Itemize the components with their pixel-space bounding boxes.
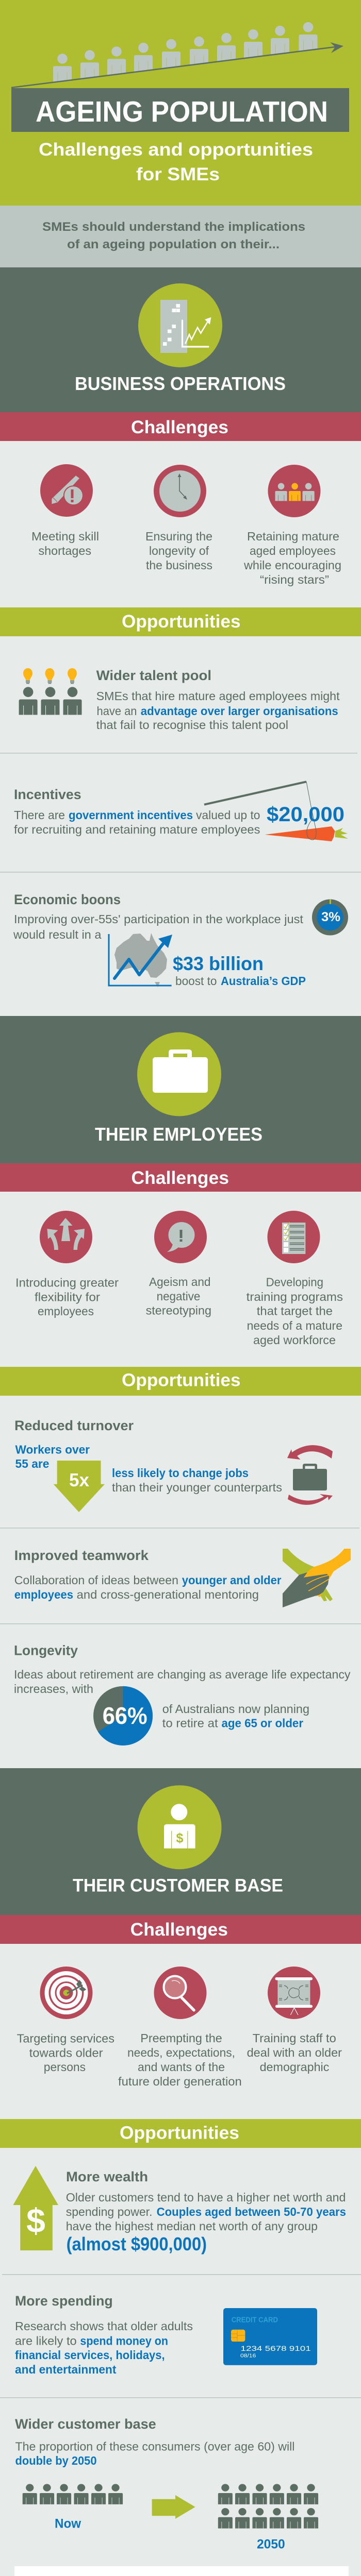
text: more spending — [15, 2293, 193, 2376]
icon: joined hands — [283, 1549, 351, 1607]
text: ensuring longevity: the business — [146, 558, 212, 572]
heading: opportunities — [0, 1367, 361, 1396]
text: reduced turnover heading: Workers over — [15, 1443, 90, 1456]
text: preempting needs: future older generation — [118, 2075, 242, 2088]
text: wider talent pool: have an — [97, 704, 137, 718]
icon: building and growth chart — [138, 283, 222, 367]
panel: logo — [14, 2566, 349, 2576]
text: wider talent pool: Wider talent pool — [96, 668, 211, 683]
chart: 3% ring — [312, 900, 348, 936]
icon: three direction arrows — [40, 1211, 92, 1263]
text: preempting needs: needs, expectations, — [127, 2046, 235, 2059]
panel: business challenges — [0, 441, 361, 607]
text: training staff — [247, 2031, 342, 2074]
icon: people with light bulbs — [19, 668, 81, 715]
text: training programs — [247, 1276, 343, 1347]
text: incentives: There are — [14, 808, 65, 822]
text: incentives: valued up to — [196, 808, 260, 822]
heading: challenges — [0, 1163, 361, 1192]
text: reduced turnover heading: 55 are — [15, 1457, 50, 1470]
icon: people in 2050 — [218, 2484, 318, 2529]
text: retirement stat: age 65 or older — [222, 1717, 303, 1730]
icon: checklist — [267, 1211, 320, 1263]
text: greater flexibility — [15, 1276, 119, 1318]
subtitle — [39, 140, 313, 184]
text: longevity — [14, 1643, 351, 1696]
stat: $33 billion GDP boost — [173, 953, 306, 988]
text: retaining mature employees: aged employees — [250, 544, 336, 557]
text: meeting skill shortages — [31, 530, 99, 557]
text: training programs: needs of a mature — [247, 1319, 342, 1332]
text: more wealth: have the highest median net worth of any group — [66, 2219, 318, 2233]
icon: up arrow with dollar: $ — [26, 2201, 45, 2240]
text: retaining mature employees: while encouraging — [243, 558, 341, 572]
text: more spending: financial services, holidays, — [15, 2348, 165, 2362]
text: training programs: aged workforce — [253, 1333, 336, 1347]
text: ageism: Ageism and — [149, 1275, 210, 1289]
heading: challenges — [0, 1915, 361, 1944]
panel: introduction: of an ageing population on their... — [67, 238, 280, 251]
text: economic boons: Improving over-55s' participation in the workplace just — [14, 912, 303, 926]
text: reduced turnover heading: Reduced turnover — [14, 1418, 134, 1433]
label: 2050: 2050 — [257, 2537, 285, 2552]
icon: presentation board — [268, 1967, 320, 2019]
text: economic boons: would result in a — [13, 928, 102, 941]
icon: target with arrow — [40, 1967, 93, 2019]
text: improved teamwork: Improved teamwork — [14, 1548, 149, 1563]
icon: customer with dollar — [137, 1785, 222, 1869]
title — [11, 88, 349, 132]
text: more wealth: (almost $900,000) — [67, 2233, 207, 2255]
text: less likely to change jobs — [112, 1466, 282, 1494]
panel: employee challenges — [0, 1192, 361, 1367]
text: longevity: Ideas about retirement are changing as average life expectancy — [14, 1668, 351, 1681]
text: improved teamwork — [14, 1548, 281, 1601]
text: less likely to change jobs: less likely to change jobs — [112, 1466, 249, 1480]
text: improved teamwork: and cross-generational mentoring — [77, 1588, 259, 1601]
text: ensuring longevity: longevity of — [149, 544, 209, 557]
panel: introduction: SMEs should understand the implications — [42, 220, 305, 234]
panel: introduction — [0, 206, 361, 267]
text: retirement stat: to retire at — [162, 1717, 218, 1730]
text: greater flexibility: employees — [38, 1304, 94, 1318]
text: greater flexibility: Introducing greater — [15, 1276, 119, 1290]
text: more spending: are likely to — [15, 2334, 77, 2348]
text: targeting services: towards older — [29, 2046, 103, 2059]
panel: business operations banner — [0, 267, 361, 412]
heading: their employees: THEIR EMPLOYEES — [95, 1124, 262, 1145]
stat: 5x down arrow: 5x — [69, 1469, 89, 1490]
text: longevity: Longevity — [14, 1643, 78, 1658]
text: ageism — [146, 1275, 211, 1317]
stat: $33 billion GDP boost: Australia’s GDP — [221, 974, 306, 988]
panel: employee opportunities — [0, 1396, 361, 1768]
icon: people now — [23, 2484, 123, 2504]
icon: clock — [154, 465, 206, 517]
text: incentives: government incentives — [69, 808, 193, 822]
text: wider customer base — [15, 2416, 294, 2467]
icon: pencil with warning — [40, 464, 93, 517]
stat: 5x down arrow — [54, 1461, 105, 1512]
icon: Australia map with rising GDP chart — [109, 933, 172, 987]
text: meeting skill shortages: Meeting skill — [31, 530, 99, 543]
panel: business opportunities — [0, 636, 361, 1016]
text: more wealth: More wealth — [66, 2169, 148, 2184]
text: more spending: More spending — [15, 2293, 113, 2309]
icon: briefcase — [137, 1032, 221, 1116]
text: more wealth: Couples aged between 50-70 years — [157, 2205, 346, 2218]
icon: speech bubble with exclamation — [154, 1211, 207, 1263]
text: training staff: demographic — [260, 2060, 330, 2074]
heading: opportunities: Opportunities — [122, 1370, 240, 1391]
text: more wealth: Older customers tend to have a higher net worth and — [66, 2191, 346, 2204]
text: economic boons: Economic boons — [14, 892, 121, 907]
icon: magnifying glass — [154, 1967, 206, 2019]
text: less likely to change jobs: than their younger counterparts — [112, 1481, 282, 1494]
text: economic boons — [13, 892, 303, 941]
text: training programs: that target the — [257, 1304, 333, 1318]
icon: carrot on a fishing rod — [204, 782, 348, 841]
chart: 3% ring: 3% — [321, 910, 340, 924]
heading: opportunities — [0, 607, 361, 636]
text: meeting skill shortages: shortages — [38, 544, 91, 557]
icon: up arrow with dollar — [13, 2166, 58, 2250]
icon: rising row of people — [53, 22, 318, 84]
text: incentives — [14, 787, 260, 836]
heading: challenges: Challenges — [130, 1920, 228, 1940]
subtitle: Challenges and opportunities — [39, 140, 313, 160]
text: ageism: stereotyping — [146, 1304, 211, 1317]
text: longevity: increases, with — [14, 1682, 93, 1696]
title: AGEING POPULATION — [36, 95, 328, 128]
text: ageism: negative — [157, 1290, 200, 1303]
text: incentives: for recruiting and retaining mature employees — [14, 823, 260, 836]
text: preempting needs: Preempting the — [140, 2031, 222, 2045]
stat: $33 billion GDP boost: $33 billion — [173, 953, 264, 974]
text: more wealth — [66, 2169, 346, 2255]
text: retirement stat — [162, 1702, 309, 1730]
text: more spending: spend money on — [80, 2334, 168, 2348]
subtitle: for SMEs — [136, 164, 220, 184]
text: retirement stat: of Australians now planning — [162, 1702, 309, 1716]
heading: their customer base: THEIR CUSTOMER BASE — [73, 1876, 283, 1896]
text: more spending: and entertainment — [15, 2363, 117, 2376]
text: wider customer base: The proportion of these consumers (over age 60) will — [15, 2440, 294, 2453]
text: ensuring longevity — [145, 530, 212, 572]
arrow: rising — [11, 42, 343, 88]
icon: credit card: 08/16 — [240, 2353, 256, 2359]
text: wider customer base: double by 2050 — [15, 2454, 97, 2467]
icon: briefcase with circular arrows — [287, 1445, 333, 1505]
panel: customer opportunities — [0, 2148, 361, 2566]
text: ensuring longevity: Ensuring the — [145, 530, 212, 543]
text: improved teamwork: Collaboration of ideas between — [14, 1573, 178, 1587]
panel: their customer base banner — [0, 1768, 361, 1915]
text: targeting services: persons — [44, 2060, 86, 2074]
chart: 66% pie — [93, 1686, 153, 1745]
panel: their employees banner — [0, 1016, 361, 1163]
heading: challenges: Challenges — [131, 417, 228, 437]
text: preempting needs — [118, 2031, 242, 2088]
text: training staff: deal with an older — [247, 2046, 342, 2059]
text: improved teamwork: younger and older — [182, 1573, 282, 1587]
text: targeting services — [17, 2031, 114, 2074]
text: more wealth: spending power. — [66, 2205, 153, 2218]
stat: $20,000: $20,000 — [267, 803, 344, 826]
text: training staff: Training staff to — [253, 2031, 336, 2045]
text: incentives: Incentives — [14, 787, 81, 802]
arrow: now to 2050 — [152, 2495, 195, 2519]
text: improved teamwork: employees — [14, 1588, 73, 1601]
text: wider talent pool — [96, 668, 340, 732]
panel: header — [0, 0, 361, 206]
text: wider talent pool: that fail to recognise this talent pool — [96, 718, 288, 732]
icon: credit card — [223, 2308, 317, 2365]
heading: opportunities: Opportunities — [120, 2123, 239, 2143]
heading: challenges: Challenges — [131, 1168, 229, 1188]
text: more spending: Research shows that older adults — [15, 2319, 193, 2333]
text: preempting needs: and wants of the — [138, 2060, 225, 2074]
text: retaining mature employees — [243, 530, 341, 586]
text: wider talent pool: advantage over larger organisations — [141, 704, 338, 718]
text: targeting services: Targeting services — [17, 2031, 114, 2045]
text: greater flexibility: flexibility for — [35, 1291, 100, 1304]
chart: 66% pie: 66% — [103, 1702, 147, 1729]
text: retaining mature employees: “rising stars” — [260, 573, 329, 586]
heading: opportunities: Opportunities — [122, 612, 240, 632]
label: now: Now — [55, 2517, 81, 2531]
icon: credit card: 1234 5678 9101 — [240, 2344, 311, 2352]
icon: credit card: CREDIT CARD — [232, 2316, 278, 2325]
text: training programs: training programs — [247, 1290, 343, 1303]
icon: customer with dollar: $ — [176, 1831, 184, 1846]
heading: challenges — [0, 412, 361, 441]
heading: opportunities — [0, 2119, 361, 2148]
text: reduced turnover heading — [14, 1418, 134, 1470]
text: wider talent pool: SMEs that hire mature aged employees might — [96, 689, 340, 703]
stat: $33 billion GDP boost: boost to — [175, 974, 217, 988]
panel: customer challenges — [0, 1944, 361, 2119]
heading: business operations: BUSINESS OPERATIONS — [75, 373, 286, 394]
text: training programs: Developing — [266, 1276, 323, 1289]
text: retaining mature employees: Retaining mature — [247, 530, 339, 543]
icon: three people — [268, 465, 321, 517]
text: wider customer base: Wider customer base — [15, 2416, 156, 2432]
